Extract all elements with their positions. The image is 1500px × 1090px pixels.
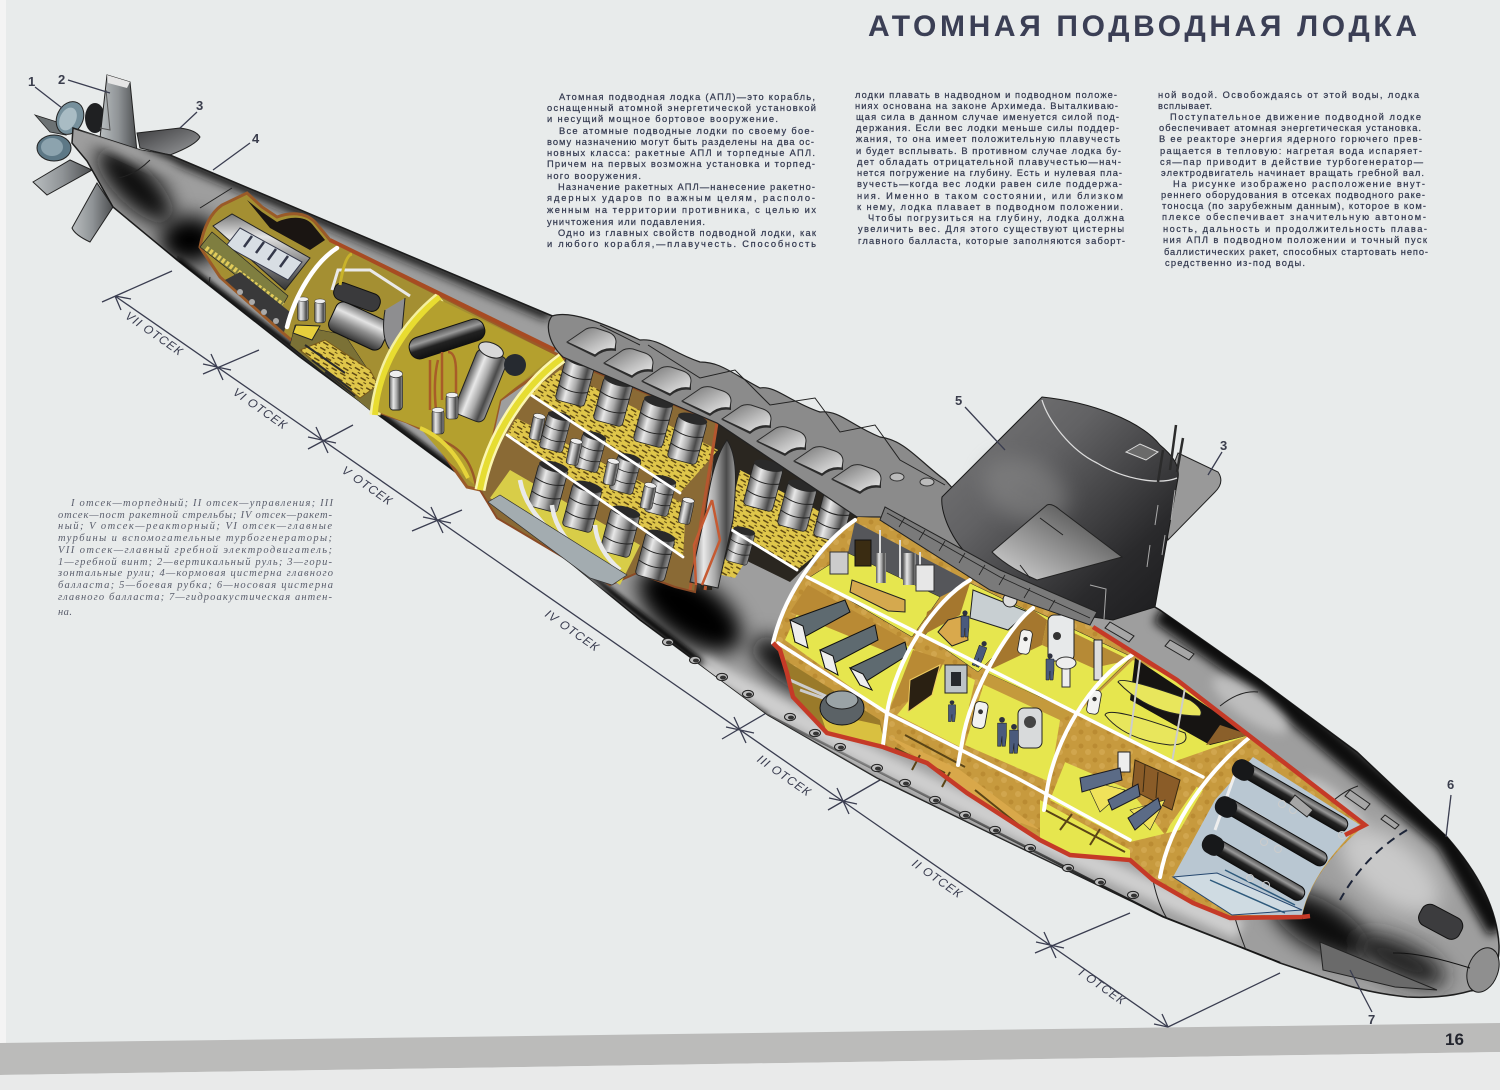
label VI: VI ОТСЕК [230,385,290,433]
missile decks [507,393,797,570]
dashed tank line on bow [1340,830,1407,900]
periscope masts [1158,425,1183,482]
callout 1: 1 [28,74,35,89]
legend text: 1—гребной винт; 2—вертикальный руль; 3—гори- [58,557,332,568]
bulkhead arc VI/V yellow [375,297,440,415]
room: corridor with crew [965,672,1075,782]
callout 3 sail: 3 [1220,438,1227,453]
text column 2 [855,90,1125,246]
callout 3 sail [1208,438,1227,475]
horizontal stern plane [137,128,200,155]
bulkhead arc V/IV yellow [480,358,562,490]
text column 3: ращается в тепловую: нагретая вода испаряет- [1160,146,1422,156]
text column 3: ся—пар приводит в действие турбогенератор— [1160,157,1424,167]
text column 2: увеличить вес. Для этого существуют цистерны [858,224,1124,234]
label VII: VII ОТСЕК [123,309,186,359]
text column 2: нется погружение на глубину. Есть и нулевая пла- [857,168,1122,178]
bow details [1105,622,1500,997]
propeller [35,97,105,161]
compartment dimension lines [102,271,1280,1027]
tail fin group [33,75,200,242]
missile silos lower row [520,458,756,582]
label V: V ОТСЕК [339,463,395,508]
missile deck casing with hatches [548,314,1093,617]
text column 1: ного вооружения. [547,171,641,181]
forward cutaway: compartments III, II, I [773,517,1365,918]
red cut edge of hull [773,627,1365,918]
bottom tank plates [488,495,627,585]
text column 1: Атомная подводная лодка (АПЛ)—это корабль, [559,92,815,102]
callout 6 [1446,777,1454,837]
compartment bulkhead arcs and decks [773,520,1250,877]
text column 1: Назначение ракетных АПЛ—нанесение ракетно- [558,182,815,192]
room: console and console crew [890,650,975,747]
title: АТОМНАЯ ПОДВОДНАЯ ЛОДКА [868,10,1417,43]
missile compartment IV [480,352,858,592]
bulkhead arc VII/VI [287,248,337,327]
lower rudder [72,183,113,242]
label III: III ОТСЕК [755,752,814,799]
label I: I ОТСЕК [1076,965,1128,1008]
text column 1: и несущий мощное бортовое вооружение. [547,114,778,124]
text column 1: новных класса: ракетные АПЛ и торпедные АПЛ. [547,148,815,158]
compartment VII machinery [200,200,325,332]
text column 2: жания, то она имеет положительную плавучесть [856,134,1120,144]
callout 3 stern: 3 [196,98,203,113]
legend text: турбины и вспомогательные турбогенераторы; [58,533,332,544]
compartment VI turbine [290,254,410,412]
hull rivets [662,638,1138,899]
text column 2: держания. Если вес лодки меньше силы поддер- [856,123,1119,133]
lower stern plane [33,160,92,195]
legend text: ный; V отсек—реакторный; VI отсек—главные [58,521,332,532]
text column 2: и будет всплывать. В противном случае лодка бу- [856,146,1121,156]
text column 1: женным на территории противника, с целью их [547,205,816,215]
text column 2: Чтобы погрузиться на глубину, лодка должна [868,213,1125,223]
text column 3: обеспечивает атомная энергетическая установка. [1159,123,1421,133]
hull airbrush shading [81,122,1499,997]
aft cutaway: compartments VII, VI, V [200,193,562,490]
text column 3: реннего оборудования в отсеках подводного раке- [1161,190,1425,200]
callout 2: 2 [58,72,65,87]
legend text: отсек—пост ракетной стрельбы; IV отсек—ракет- [58,510,332,521]
ballistic missile and tube [690,423,735,590]
legend text: главного балласта; 7—гидроакустическая антен- [58,592,332,603]
room: provisions racks [785,585,915,713]
legend text [57,498,333,618]
text column 3: тоносца (по зарубежным данным), которое в ком- [1162,201,1426,211]
text column 3: электродвигатель начинает вращать гребной вал. [1161,168,1424,178]
text column 1: оснащенный атомной энергетической установкой [547,103,816,113]
missile silos middle row [529,409,695,525]
text column 3: баллистических ракет, способных стартовать непо- [1164,247,1428,257]
hull seams [118,160,1358,950]
footer band [0,1023,1500,1090]
callout 7: 7 [1368,1012,1375,1027]
text column 1: Причем на первых возможна установка и торпед- [547,159,815,169]
legend text: зонтальные рули; 4—кормовая цистерна главного [57,568,333,579]
text column 1 [547,92,817,249]
text column 2: главного балласта, которые заполняются заборт- [858,236,1125,246]
text column 3 [1158,90,1428,268]
text column 3: ной водой. Освобождаясь от этой воды, лодка [1158,90,1420,100]
legend text: на. [58,607,72,618]
legend text: балласта; 5—боевая рубка; 6—носовая цистерна [58,580,333,591]
text column 2: вучесть—когда вес лодки равен силе поддержа- [857,179,1122,189]
text column 3: В ее реакторе энергия ядерного горючего прев- [1159,134,1422,144]
legend text: I отсек—торпедный; II отсек—управления; III [70,498,333,509]
text column 1: Все атомные подводные лодки по своему бое- [559,126,814,136]
room: wardroom with seated crew [1050,715,1203,842]
missile deck floors [528,370,718,493]
callout 1 [28,74,62,108]
torpedo room [1173,756,1360,915]
text column 2: дет обладать отрицательной плавучестью—нач- [857,157,1121,167]
callout 3 stern [180,98,203,128]
label IV: IV ОТСЕК [542,607,602,655]
callout 4 [213,131,260,170]
lower deck storage [785,660,1130,860]
callout 6: 6 [1447,777,1454,792]
room: upper compartment II [985,610,1132,713]
text column 3: плексе обеспечивает значительную автоном- [1162,212,1426,222]
text column 2: к нему, лодка плавает в подводном положении. [857,202,1123,212]
text column 3: всплывает. [1158,101,1212,111]
label II: II ОТСЕК [909,856,965,901]
text column 2: ниях основана на законе Архимеда. Выталкиваю- [855,101,1118,111]
text column 2: щая сила в данном случае именуется силой под- [856,112,1119,122]
text column 3: Поступательное движение подводной лодке [1170,112,1421,122]
sail rear plane [1160,453,1221,540]
text column 2: лодки плавать в надводном и подводном положе- [855,90,1117,100]
text column 1: ядерных ударов по важным целям, располо- [547,193,815,203]
callout 7 [1350,970,1375,1027]
text column 3: ность, дальность и продолжительность плава- [1163,224,1427,234]
text column 1: уничтожения или подавления. [547,217,705,227]
text column 3: средственно из-под воды. [1165,258,1305,268]
room: bunks under red hull [1078,658,1250,763]
callout 5: 5 [955,393,962,408]
callout 4: 4 [252,131,260,146]
vertical rudder [100,75,137,152]
grating strip along deck [880,507,1097,625]
page number: 16 [1445,1030,1464,1049]
text column 2: ния. Именно в таком состоянии, или близком [857,191,1123,201]
text column 3: ния АПЛ в подводном положении и точный пуск [1163,235,1428,245]
pressure hull [72,128,1499,997]
callout 5 [955,393,1005,450]
callout 2 [58,72,110,93]
text column 1: Одно из главных свойств подводной лодки, как [558,228,817,238]
text column 1: вому назначению могут быть разделены на два ос- [547,137,814,147]
text column 1: и любого корабля,—плавучесть. Способность [547,239,816,249]
conning tower (sail) [942,397,1183,620]
compartment V reactor [378,300,555,490]
sail diving plane [992,505,1122,580]
missile silos upper row [555,352,854,543]
room: upper control post [923,583,1030,672]
text column 3: На рисунке изображено расположение внут- [1173,179,1425,189]
room: upper compartment III [810,522,970,637]
legend text: VII отсек—главный гребной электродвигатель; [58,545,332,556]
